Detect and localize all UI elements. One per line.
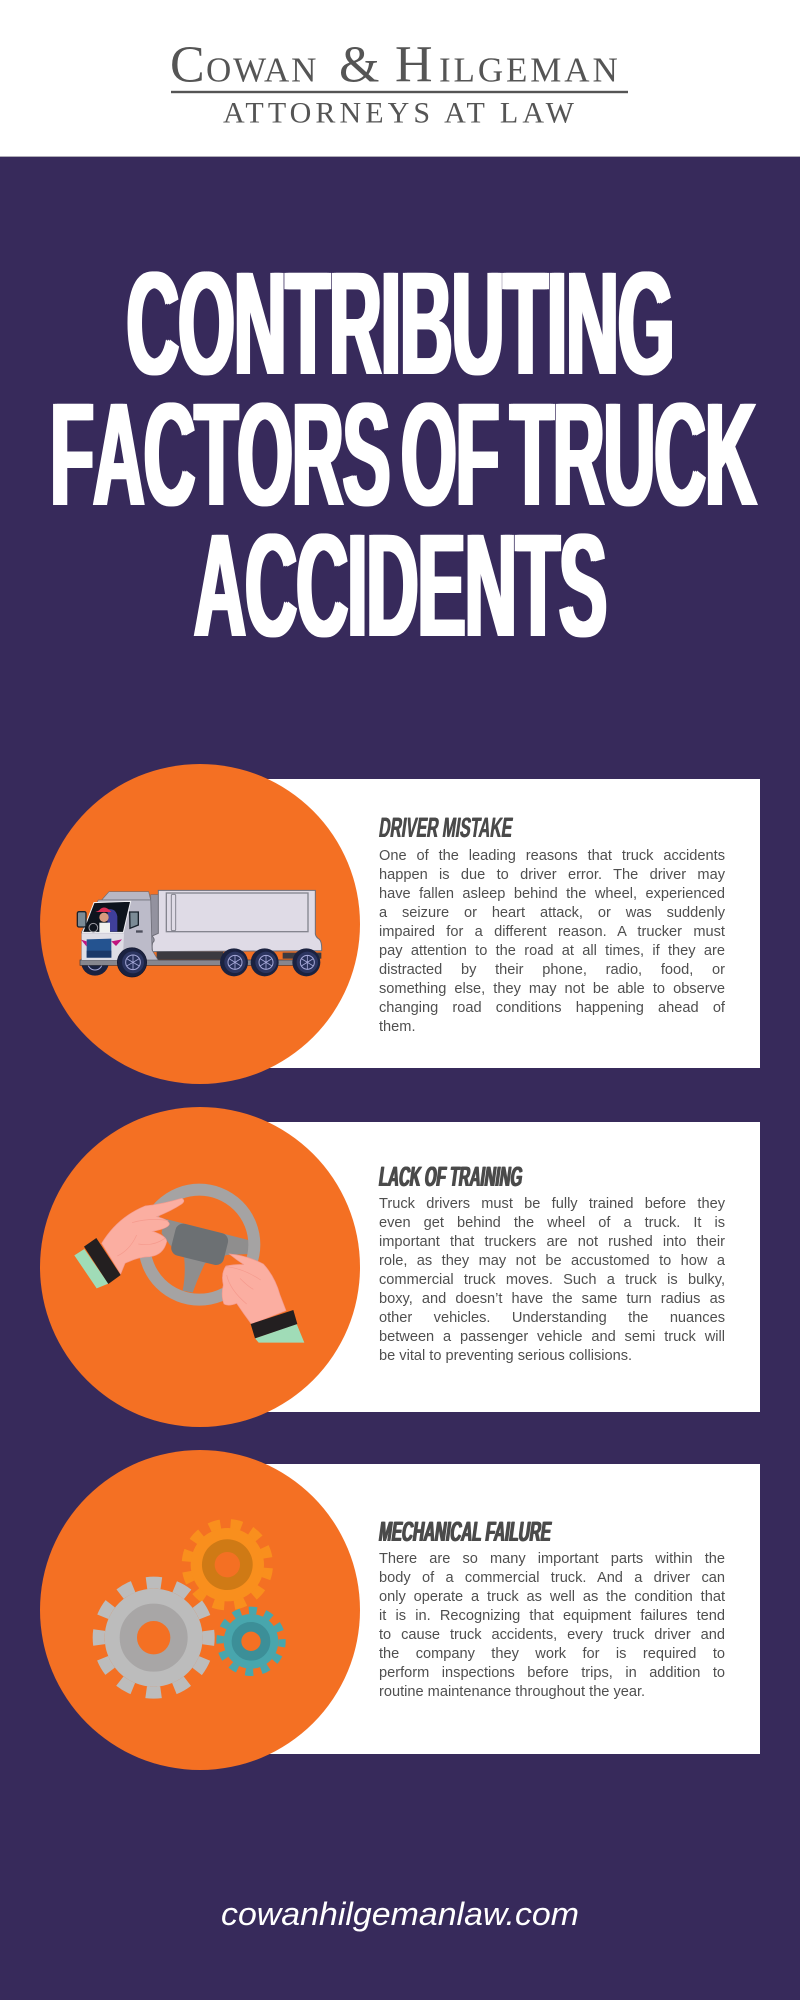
title: ACCIDENTS xyxy=(194,504,606,668)
icon: gears xyxy=(92,1519,286,1699)
heading: driver mistake: DRIVER MISTAKE xyxy=(377,812,515,843)
logo: OWAN xyxy=(206,51,318,90)
icon: steering wheel with hands xyxy=(74,1184,304,1343)
header band xyxy=(0,0,800,157)
text: lack of training: even get behind the wheel of a truck. It is xyxy=(379,1215,725,1231)
text: mechanical failure: perform inspections before trips, in addition to xyxy=(379,1665,725,1681)
text: lack of training: commercial truck moves. Such a truck is bulky, xyxy=(379,1272,725,1288)
panel: mechanical failure xyxy=(40,1450,760,1770)
text: lack of training xyxy=(379,1196,725,1364)
text: lack of training: other vehicles. Understanding the nuances xyxy=(379,1310,725,1326)
gear: grey xyxy=(99,1583,209,1693)
text: mechanical failure: it is in. Recognizing that equipment failures tend xyxy=(379,1608,725,1624)
logo: ILGEMAN xyxy=(439,51,621,90)
text: lack of training: role, as they may not be accustomed to how a xyxy=(379,1253,725,1269)
text: mechanical failure: the company they work for is required to xyxy=(379,1646,725,1662)
text: lack of training: between a passenger vehicle and semi truck will xyxy=(379,1329,725,1345)
gear: teal xyxy=(218,1609,284,1674)
text: lack of training: boxy, and doesn’t have the same turn radius as xyxy=(379,1291,725,1307)
title: CONTRIBUTING xyxy=(126,242,674,406)
text: lack of training: important that truckers are not rushed into their xyxy=(379,1234,725,1250)
heading: mechanical failure: MECHANICAL FAILURE xyxy=(377,1516,553,1547)
text: mechanical failure: There are so many important parts within the xyxy=(379,1551,725,1567)
footer url: cowanhilgemanlaw.com xyxy=(221,1896,579,1932)
text: driver mistake: pay attention to the road at all times, if they are xyxy=(379,943,725,959)
logo: & xyxy=(339,37,379,94)
gear: orange xyxy=(179,1516,276,1613)
heading: lack of training: LACK OF TRAINING xyxy=(377,1161,525,1192)
text: driver mistake: distracted by their phone, radio, food, or xyxy=(379,962,725,978)
text: driver mistake: a seizure or heart attack, or was suddenly xyxy=(379,905,725,921)
text: driver mistake: happen is due to driver error. The driver may xyxy=(379,867,725,883)
text: mechanical failure xyxy=(379,1551,725,1700)
text: mechanical failure: to cause truck accidents, every truck driver and xyxy=(379,1627,725,1643)
text: driver mistake: One of the leading reasons that truck accidents xyxy=(379,848,725,864)
text: driver mistake: something else, they may not be able to observe xyxy=(379,981,725,997)
text: lack of training: Truck drivers must be fully trained before they xyxy=(379,1196,725,1212)
text: driver mistake xyxy=(379,848,725,1035)
text: mechanical failure: body of a commercial truck. And a driver can xyxy=(379,1570,725,1586)
text: driver mistake: changing road conditions happening ahead of xyxy=(379,1000,725,1016)
text: driver mistake: have fallen asleep behind the wheel, experienced xyxy=(379,886,725,902)
text: mechanical failure: only operate a truck as well as the condition that xyxy=(379,1589,725,1605)
text: lack of training: be vital to preventing serious collisions. xyxy=(379,1348,632,1364)
logo: C xyxy=(170,37,205,94)
icon: truck xyxy=(76,890,322,978)
title xyxy=(50,242,758,668)
logo xyxy=(170,37,628,130)
text: mechanical failure: routine maintenance throughout the year. xyxy=(379,1684,645,1700)
panel: driver mistake xyxy=(40,764,760,1084)
logo: H xyxy=(395,37,433,94)
text: driver mistake: impaired for a different reason. A trucker must xyxy=(379,924,725,940)
panel: lack of training xyxy=(40,1107,760,1427)
text: driver mistake: them. xyxy=(379,1019,416,1035)
title: FACTORS OF TRUCK xyxy=(50,373,756,537)
logo: ATTORNEYS AT LAW xyxy=(223,97,575,130)
